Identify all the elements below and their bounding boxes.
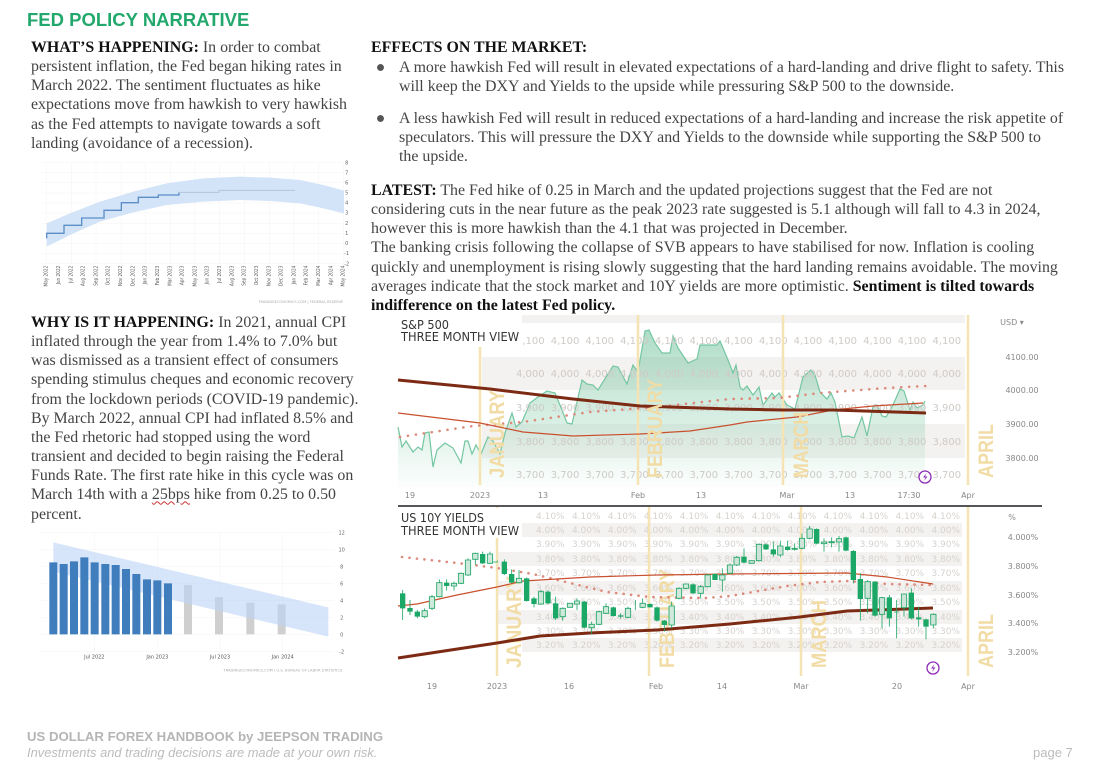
y axis labels: -2	[344, 261, 349, 267]
month labels: JANUARY	[503, 576, 526, 668]
month labels: MARCH	[808, 600, 831, 668]
x axis labels: 20	[892, 682, 902, 691]
x axis labels: Jul 2023	[209, 655, 230, 661]
yield grid labels: 3.60% 3.60% 3.60% 3.60% 3.60% 3.60% 3.60% 3.60% 3.60% 3.60% 3.60% 3.60%	[536, 584, 961, 594]
source note: TRADINGECONOMICS.COM | U.S. BUREAU OF LABOR STATISTICS	[222, 668, 342, 672]
month labels: Mar 2024	[316, 266, 322, 286]
month labels: FEBRUARY	[644, 379, 667, 478]
text block: latest: The banking crisis following the collapse of SVB appears to have stabilised for now. Inflation is cooling	[371, 239, 1034, 256]
chart: US 10Y yields three month view	[398, 507, 1039, 691]
month labels: Oct 2023	[254, 266, 260, 285]
month labels: Jul 2022	[68, 266, 74, 284]
month labels: Jan 2023	[142, 266, 149, 285]
y axis labels: 8	[345, 160, 348, 166]
y axis labels: 8	[340, 564, 343, 570]
text block: what's happening: WHAT’S HAPPENING: In order to combat	[31, 39, 321, 56]
month labels: Sep 2023	[241, 266, 248, 286]
month markers	[480, 315, 968, 485]
y axis labels: 3	[345, 211, 348, 217]
y axis labels: 5	[345, 191, 348, 197]
price grid labels: 3,800 3,800 3,800 3,800 3,800 3,800 3,800 3,800 3,800 3,800 3,800 3,800 3,800	[516, 437, 961, 448]
x axis labels: Feb	[631, 491, 645, 500]
divider between charts	[398, 505, 1042, 507]
month labels: Oct 2022	[105, 266, 112, 285]
price grid labels: 3,900 3,900 3,900 3,900 3,900 3,900 3,900 3,900 3,900 3,900 3,900 3,900 3,900	[516, 403, 961, 414]
price grid labels: 4,100 4,100 4,100 4,100 4,100 4,100 4,100 4,100 4,100 4,100 4,100 4,100 4,100	[516, 336, 961, 347]
bullet one	[399, 59, 1064, 95]
month labels: Feb 2024	[303, 266, 310, 285]
text block: why is it happening: March 14th with a 25bps hike from 0.25 to 0.50	[31, 486, 336, 503]
y axis labels: 10	[338, 547, 345, 553]
x axis labels: Jan 2023	[145, 655, 168, 661]
actual CPI bars	[49, 557, 172, 634]
y axis labels: %	[1008, 513, 1016, 522]
month labels: APRIL	[975, 424, 998, 478]
month labels: May 2022	[43, 266, 50, 287]
bullet one: will keep the DXY and Yields to the upside while pressuring S&P 500 to the downside.	[399, 78, 954, 95]
lightning icon	[927, 662, 939, 674]
y axis labels: 4100.00	[1005, 353, 1039, 362]
title: FED POLICY NARRATIVE	[27, 9, 249, 30]
text block: why is it happening	[31, 314, 358, 523]
text block: latest: however this is more hawkish than the 4.1 that was projected in December.	[371, 220, 848, 237]
text block: why is it happening: transient and decided to begin raising the Federal	[31, 448, 344, 465]
source note: TRADINGECONOMICS.COM | FEDERAL RESERVE	[257, 300, 343, 304]
chart: annual CPI projection	[42, 530, 345, 672]
month labels: Nov 2023	[266, 266, 272, 286]
month labels: Jan 2024	[291, 266, 297, 285]
yield grid labels: 4.10% 4.10% 4.10% 4.10% 4.10% 4.10% 4.10% 4.10% 4.10% 4.10% 4.10% 4.10%	[536, 512, 961, 522]
moving averages	[398, 380, 926, 437]
y axis labels: 3.600%	[1008, 591, 1039, 600]
text block: latest: quickly and unemployment is rising slowly suggesting that the hard landing remains avoidable. The moving	[371, 259, 1058, 276]
x axis labels: 17:30	[897, 491, 921, 500]
x axis labels: 13	[696, 491, 706, 500]
month labels	[43, 266, 347, 287]
month labels: Nov 2022	[118, 266, 124, 286]
y axis labels: 4000.00	[1005, 386, 1039, 395]
candlesticks right	[727, 526, 936, 639]
footer: page number: page 7	[1033, 745, 1073, 760]
x axis labels: 13	[538, 491, 548, 500]
heading: effects on the market: EFFECTS ON THE MARKET:	[371, 39, 587, 56]
y axis labels: 3.200%	[1008, 648, 1039, 657]
x axis labels: Jan 2024	[271, 655, 294, 661]
price grid labels: 4,000 4,000 4,000 4,000 4,000 4,000 4,000 4,000 4,000 4,000 4,000 4,000 4,000	[516, 369, 961, 380]
y axis labels: 3900.00	[1005, 420, 1039, 429]
y axis labels: 3.400%	[1008, 619, 1039, 628]
yield grid labels: 3.50% 3.50% 3.50% 3.50% 3.50% 3.50% 3.50% 3.50% 3.50% 3.50% 3.50% 3.50%	[536, 598, 961, 608]
x axis labels: 19	[427, 682, 437, 691]
chart title: S&P 500	[401, 318, 449, 332]
chart title: US 10Y YIELDS	[401, 511, 484, 525]
y axis labels: 7	[345, 170, 348, 176]
month labels: May 2023	[192, 266, 198, 287]
text block: latest: LATEST: The Fed hike of 0.25 in March and the updated projections suggest that the Fed are not	[371, 182, 992, 199]
text block: why is it happening: from the lockdown periods (COVID-19 pandemic).	[31, 391, 358, 408]
month labels: Jul 2023	[217, 266, 223, 284]
y axis labels	[1008, 513, 1039, 657]
bullet marks	[377, 64, 384, 123]
month labels: Dec 2023	[278, 266, 285, 286]
text block: why is it happening: By March 2022, annual CPI had inflated 8.5% and	[31, 410, 353, 427]
month markers	[497, 507, 968, 676]
x axis labels	[405, 491, 976, 500]
x axis labels: Mar	[793, 682, 809, 691]
text block: why is it happening: was dismissed as a transient effect of consumers	[31, 352, 338, 369]
month labels: Apr 2024	[328, 266, 334, 285]
month labels: FEBRUARY	[656, 569, 679, 668]
bullet one: A more hawkish Fed will result in elevated expectations of a hard-landing and drive flight to safety. This	[399, 59, 1064, 76]
chart title	[398, 508, 520, 538]
text block: latest: considering cuts in the near future as the peak 2023 rate suggested is 5.1 although will fall to 4.3 in 2024,	[371, 201, 1040, 218]
text block: what's happening: landing (avoidance of a recession).	[31, 135, 253, 152]
chart title: THREE MONTH VIEW	[400, 524, 519, 538]
x axis labels: Apr	[961, 491, 976, 500]
text block: latest	[371, 182, 1058, 314]
y axis labels: 4	[340, 598, 343, 604]
chart title: THREE MONTH VIEW	[400, 330, 519, 344]
text block: latest: averages indicate that the stock market and 10Y yields are more optimistic. Sentiment is tilted towards	[371, 278, 1034, 295]
y axis labels: 6	[340, 581, 343, 587]
price grid labels: 3,700 3,700 3,700 3,700 3,700 3,700 3,700 3,700 3,700 3,700 3,700 3,700 3,700	[516, 470, 961, 481]
x axis labels	[427, 682, 976, 691]
y axis labels: 1	[345, 231, 348, 237]
text block: why is it happening: spending stimulus cheques and economic recovery	[31, 371, 354, 388]
chart title	[400, 318, 519, 344]
month labels	[486, 379, 998, 478]
text block: what's happening: March 2022. The sentiment fluctuates as hike	[31, 77, 321, 94]
text block: what's happening: as the Fed attempts to navigate towards a soft	[31, 116, 320, 133]
month labels	[503, 569, 998, 668]
text block: why is it happening: percent.	[31, 506, 82, 523]
text block: why is it happening: WHY IS IT HAPPENING: In 2021, annual CPI	[31, 314, 346, 331]
y axis labels: -2	[339, 649, 344, 655]
month labels: Aug 2023	[229, 266, 235, 286]
month labels: Sep 2022	[93, 266, 99, 286]
x axis labels: 19	[405, 491, 415, 500]
y axis labels	[1000, 318, 1039, 463]
month labels: Apr 2023	[179, 266, 186, 285]
x axis labels	[83, 655, 294, 661]
yield grid labels	[536, 512, 961, 651]
y axis labels: 4	[345, 201, 348, 207]
bullet two: the upside.	[399, 148, 468, 165]
bullet list: market effects	[377, 59, 1064, 165]
x axis labels: Feb	[649, 682, 663, 691]
yield grid labels: 3.20% 3.20% 3.20% 3.20% 3.20% 3.20% 3.20% 3.20% 3.20% 3.20% 3.20% 3.20%	[536, 641, 961, 651]
chart: S&P 500 three month view	[397, 315, 1039, 500]
y axis labels: 0	[345, 241, 348, 247]
footer: disclaimer: Investments and trading decisions are made at your own risk.	[27, 745, 377, 760]
text block: what's happening	[31, 39, 347, 152]
text block: what's happening: expectations move from hawkish to very hawkish	[31, 96, 347, 113]
footer: handbook credit: US DOLLAR FOREX HANDBOOK by JEEPSON TRADING	[27, 729, 383, 744]
bullet two: speculators. This will pressure the DXY and Yields to the downside while supporting the S&P 500 to	[399, 129, 1041, 146]
projection band	[53, 542, 328, 637]
x axis labels: 14	[717, 682, 727, 691]
y axis labels: USD ▾	[1000, 318, 1024, 327]
x axis labels: Apr	[961, 682, 976, 691]
bullet two: A less hawkish Fed will result in reduced expectations of a hard-landing and increase the risk appetite of	[399, 110, 1063, 127]
yield grid labels: 4.00% 4.00% 4.00% 4.00% 4.00% 4.00% 4.00% 4.00% 4.00% 4.00% 4.00% 4.00%	[536, 526, 961, 536]
month labels: Feb 2023	[155, 266, 161, 285]
y axis labels: 0	[340, 632, 343, 638]
price grid labels	[516, 336, 961, 481]
y axis labels: 6	[345, 181, 348, 187]
yield grid labels: 3.40% 3.40% 3.40% 3.40% 3.40% 3.40% 3.40% 3.40% 3.40% 3.40% 3.40% 3.40%	[536, 613, 961, 623]
area price line	[398, 330, 925, 487]
month labels: Jun 2023	[204, 266, 211, 285]
month labels: Jun 2022	[56, 266, 62, 285]
x axis labels: 2023	[487, 682, 507, 691]
text block: why is it happening: the Fed rhetoric had stopped using the word	[31, 429, 310, 446]
y axis labels: 2	[340, 615, 343, 621]
y axis labels: 3.800%	[1008, 562, 1039, 571]
projected rate steps	[179, 190, 295, 192]
forecast bars	[184, 585, 286, 634]
y axis labels: 12	[338, 530, 345, 536]
month labels: May 2024	[340, 266, 347, 287]
yield grid labels: 3.70% 3.70% 3.70% 3.70% 3.70% 3.70% 3.70% 3.70% 3.70% 3.70% 3.70% 3.70%	[536, 569, 961, 579]
month labels: MARCH	[790, 412, 813, 478]
yield grid labels: 3.30% 3.30% 3.30% 3.30% 3.30% 3.30% 3.30% 3.30% 3.30% 3.30% 3.30% 3.30%	[536, 627, 961, 637]
x axis labels: Jul 2022	[83, 655, 105, 661]
x axis labels: Mar	[779, 491, 795, 500]
text block: what's happening: persistent inflation, the Fed began hiking rates in	[31, 58, 342, 75]
y axis labels: 4.000%	[1008, 533, 1039, 542]
y axis labels: -1	[344, 251, 349, 257]
y axis labels	[338, 530, 345, 655]
month labels: JANUARY	[486, 390, 509, 478]
projection band	[47, 177, 344, 247]
text block: why is it happening: inflated through the year from 1.4% to 7.0% but	[31, 333, 337, 350]
x axis labels: 16	[564, 682, 574, 691]
yield grid labels: 3.80% 3.80% 3.80% 3.80% 3.80% 3.80% 3.80% 3.80% 3.80% 3.80% 3.80% 3.80%	[536, 555, 961, 565]
bullet two	[399, 110, 1064, 165]
chart: fed funds rate projection	[42, 160, 349, 304]
y axis labels	[344, 160, 349, 267]
moving averages	[398, 557, 933, 658]
x axis labels: 13	[845, 491, 855, 500]
rate steps	[47, 192, 179, 238]
text block: why is it happening: Funds Rate. The first rate hike in this cycle was on	[31, 467, 353, 484]
y axis labels: 3800.00	[1005, 454, 1039, 463]
y axis labels: 2	[345, 221, 348, 227]
text block: latest: indifference on the latest Fed policy.	[371, 297, 615, 314]
month labels: Dec 2022	[130, 266, 136, 286]
candlesticks left	[400, 552, 725, 634]
yield grid labels: 3.90% 3.90% 3.90% 3.90% 3.90% 3.90% 3.90% 3.90% 3.90% 3.90% 3.90% 3.90%	[536, 540, 961, 550]
month labels: Aug 2022	[80, 266, 87, 286]
month labels: APRIL	[975, 614, 998, 668]
month labels: Mar 2023	[167, 266, 173, 286]
x axis labels: 2023	[470, 491, 490, 500]
lightning icon	[919, 471, 931, 483]
